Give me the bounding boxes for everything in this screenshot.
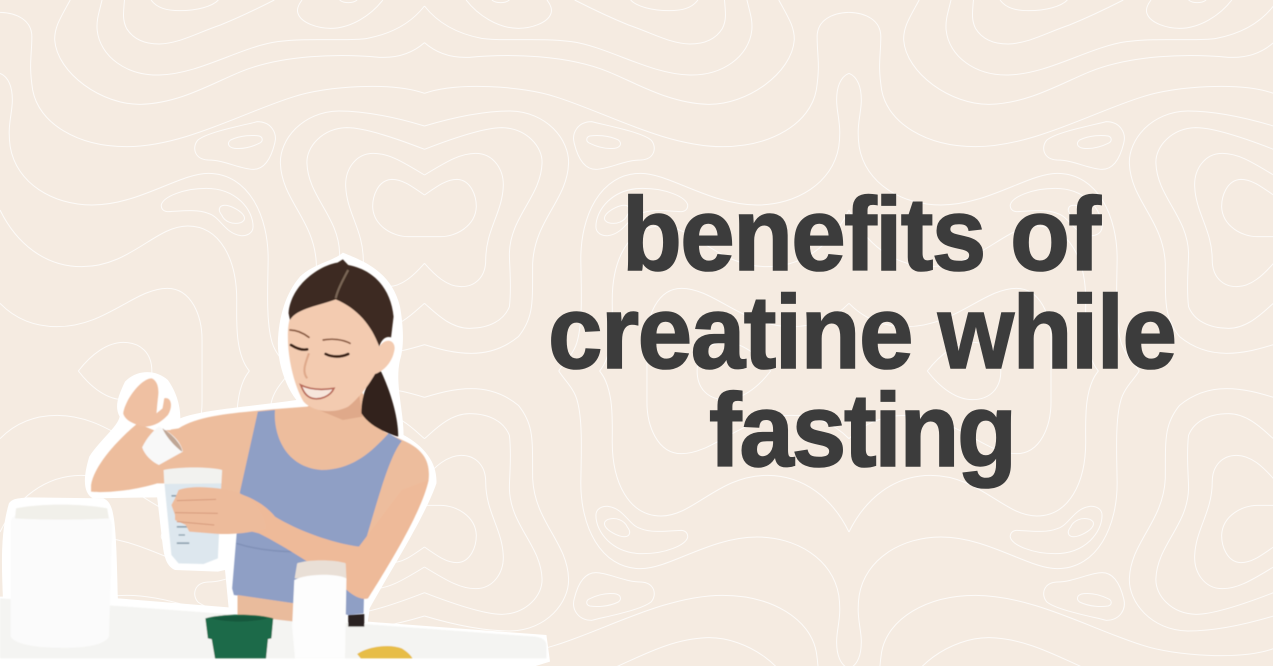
- photo: woman scooping creatine powder into a shaker at a table: [0, 253, 550, 666]
- midriff: [237, 595, 295, 622]
- table: [0, 598, 546, 658]
- waistband: [348, 614, 364, 627]
- title: [548, 177, 1177, 489]
- shaker cup: [164, 467, 222, 564]
- arms and torso skin: [91, 383, 429, 599]
- powder jar: [11, 505, 112, 648]
- title: creatine while: [548, 275, 1177, 391]
- hair part: [336, 270, 348, 298]
- banana slice: [357, 646, 412, 658]
- face and ear: [288, 295, 395, 411]
- hand holding shaker: [171, 487, 266, 534]
- ponytail: [361, 367, 398, 437]
- glass of milk: [292, 560, 346, 658]
- tank top band seam: [236, 543, 296, 552]
- forearm over top: [229, 480, 429, 599]
- smile: [301, 385, 334, 399]
- eyes and brows: [290, 330, 350, 356]
- title: benefits of: [622, 177, 1101, 293]
- title: fasting: [709, 373, 1017, 489]
- tank top: [232, 410, 402, 615]
- pouring hand: [123, 378, 171, 427]
- scoop: [142, 402, 183, 465]
- hair: [289, 259, 394, 347]
- white sticker outline: [0, 253, 550, 666]
- nose shadow: [304, 353, 309, 378]
- neck shadow: [311, 393, 362, 420]
- green cap: [205, 615, 273, 658]
